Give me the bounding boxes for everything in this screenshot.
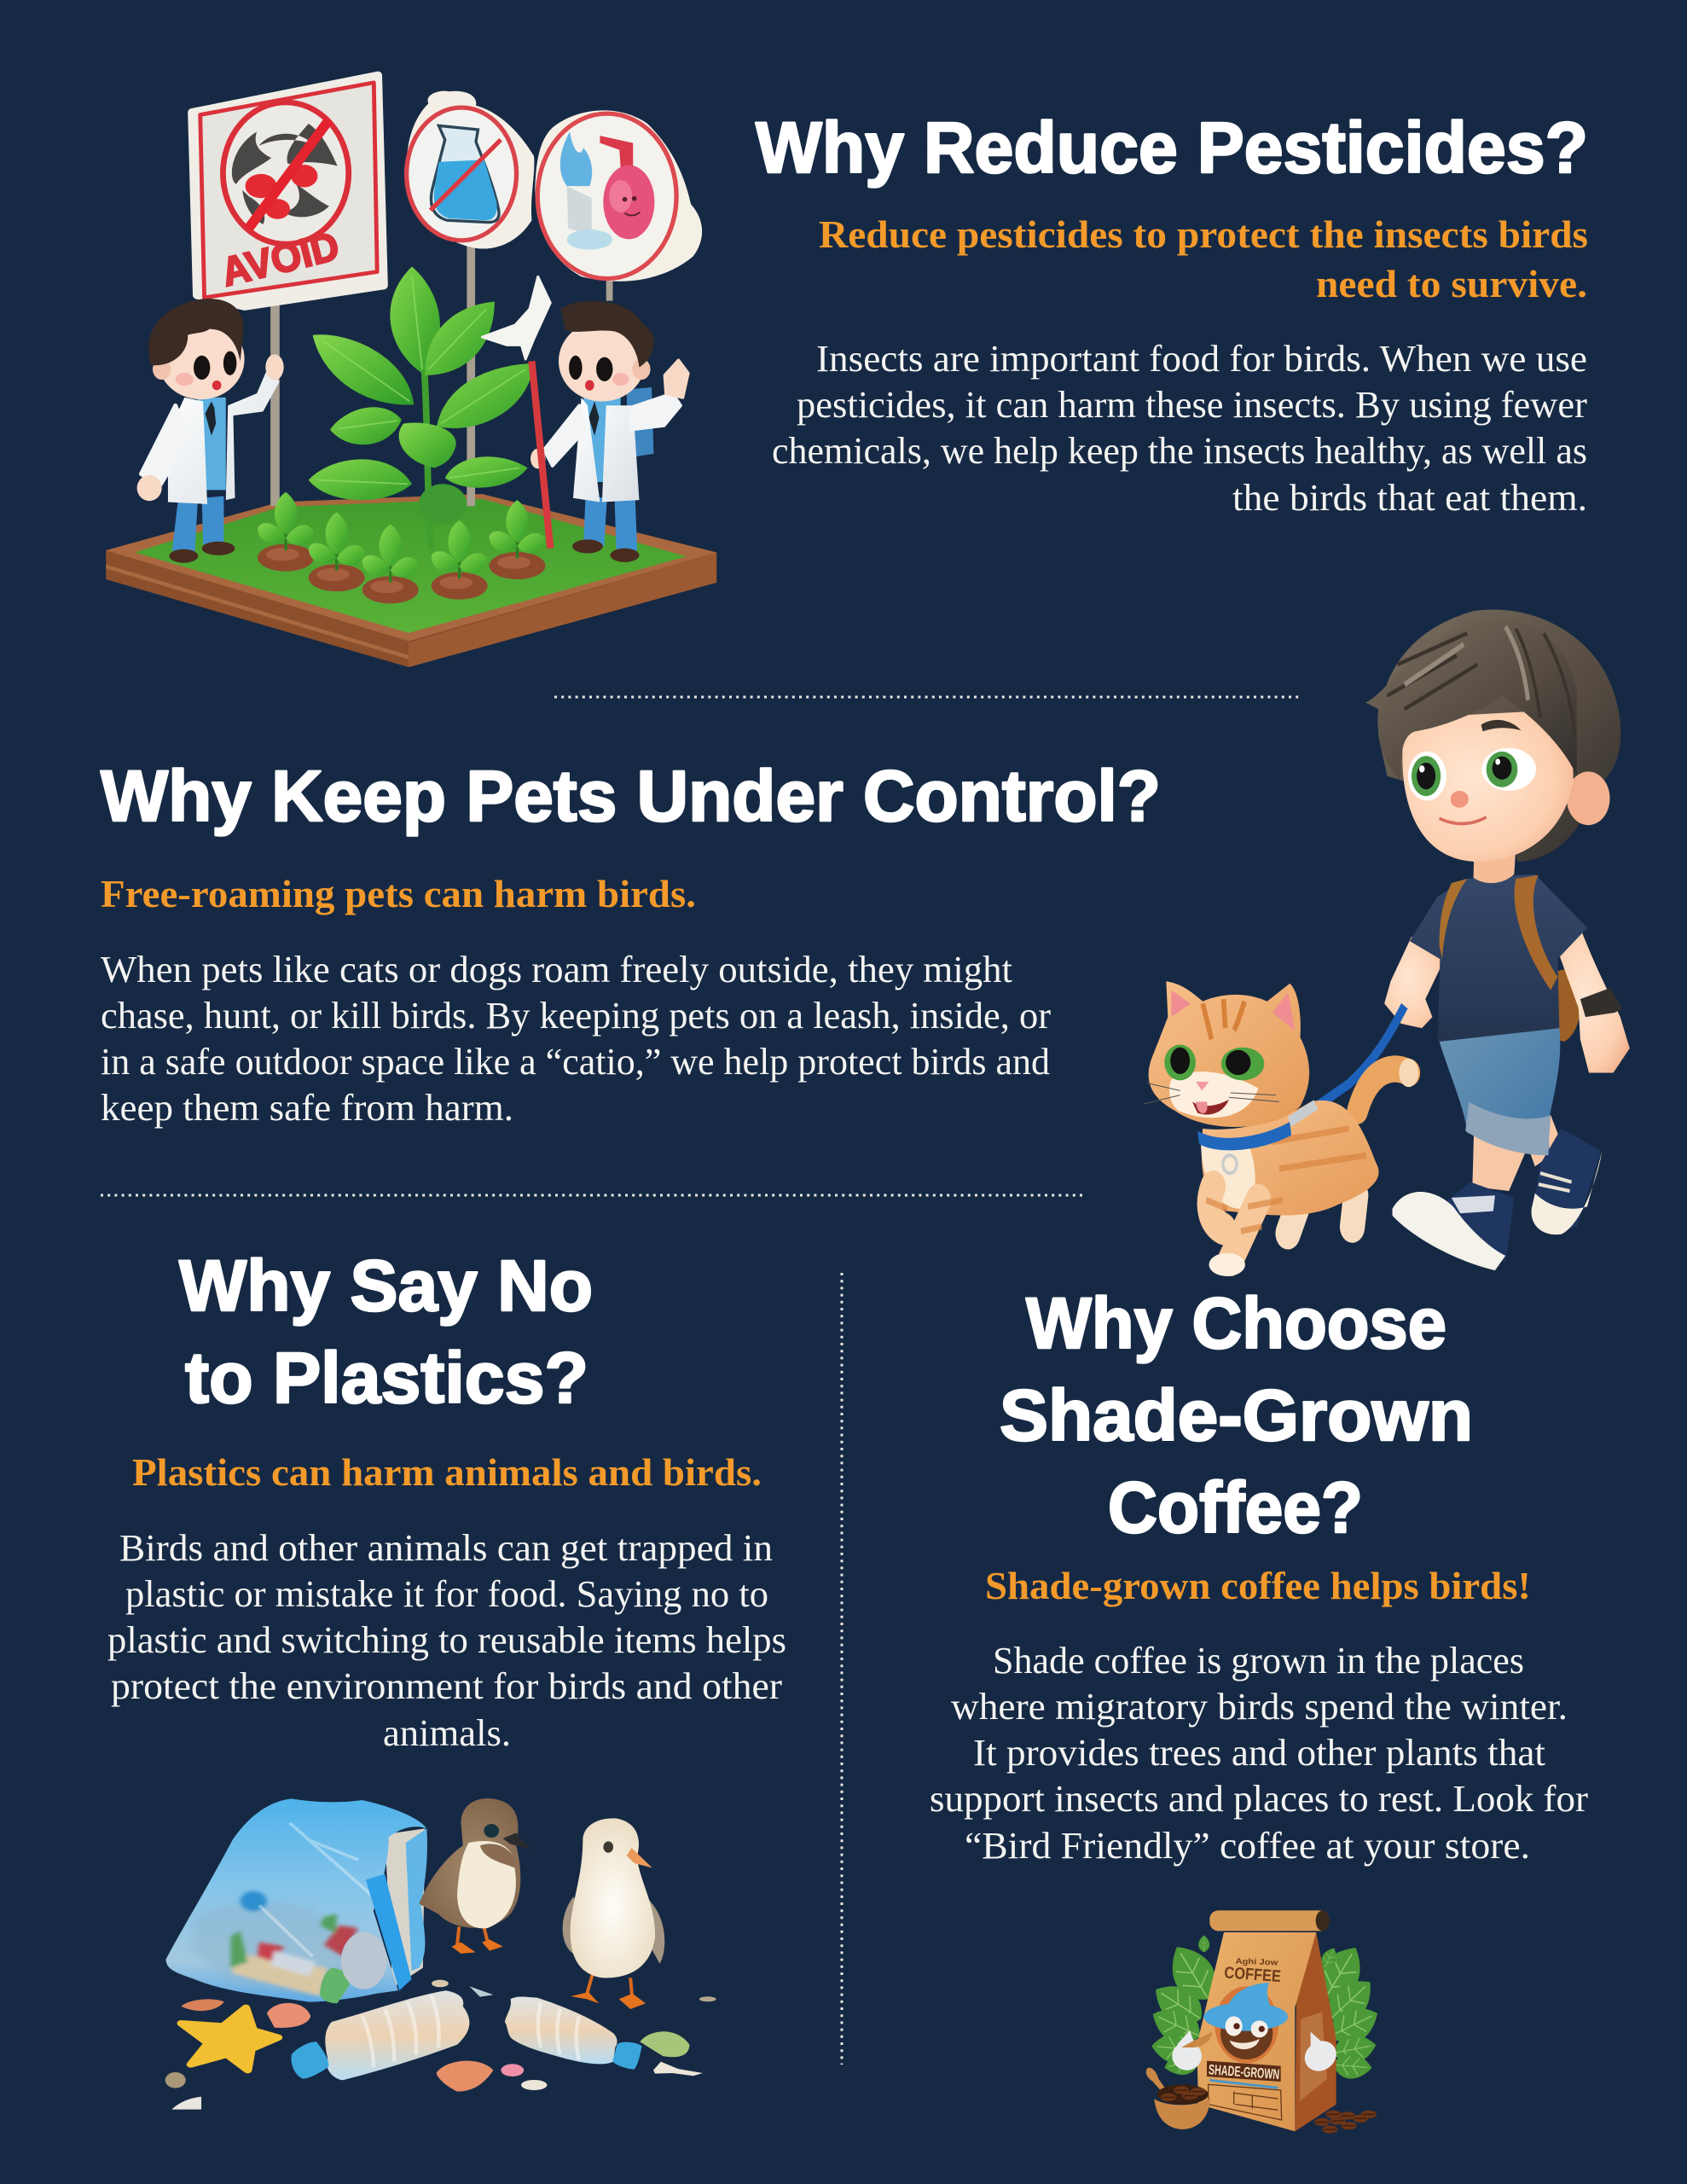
heading: Why Keep Pets Under Control? [101, 756, 1161, 836]
bag front [1197, 1932, 1316, 2131]
leash [1307, 1006, 1405, 1113]
body text: It provides trees and other plants that [973, 1732, 1545, 1774]
subheading: Shade-grown coffee helps birds! [985, 1565, 1531, 1607]
eyes [1408, 752, 1446, 800]
red stick and white bird [482, 276, 550, 549]
shells and starfish [165, 1980, 716, 2110]
mascot face [1203, 1983, 1288, 2063]
sign label: AVOID [217, 224, 344, 295]
back and far legs [1288, 1195, 1356, 1234]
heading: Coffee? [1108, 1467, 1363, 1548]
tail [1358, 1069, 1410, 1111]
coffee text: COFFEE [1224, 1964, 1282, 1986]
loose beans [1161, 2086, 1377, 2134]
body text: Birds and other animals can get trapped in [119, 1527, 773, 1569]
scientist right [530, 301, 688, 562]
scientist left [137, 299, 284, 563]
body text [107, 1527, 786, 1754]
heading: Why Say No [179, 1246, 593, 1326]
seedlings [258, 492, 545, 603]
hair back [1378, 610, 1620, 862]
body text: support insects and places to rest. Look for [930, 1778, 1588, 1820]
body text: chemicals, we help keep the insects healthy, as well as [772, 430, 1587, 472]
body text: chase, hunt, or kill birds. By keeping pets on a leash, inside, or [101, 995, 1051, 1037]
heading: Why Reduce Pesticides? [756, 107, 1588, 188]
body text [930, 1640, 1588, 1867]
bowl and scoop [1146, 2068, 1210, 2129]
cat [1144, 981, 1418, 1276]
bag roll [1209, 1910, 1330, 1931]
subheading: Plastics can harm animals and birds. [132, 1451, 762, 1494]
shade-grown label: SHADE-GROWN [1208, 2061, 1280, 2082]
illustration: plastic waste and birds [165, 1798, 716, 2110]
illustration: scientists, plant and warning signs [106, 75, 716, 667]
body text: pesticides, it can harm these insects. By using fewer [797, 384, 1587, 426]
illustration: boy walking cat on leash [1144, 610, 1630, 1276]
bag side [1295, 1932, 1336, 2131]
subheading: Reduce pesticides to protect the insects birds [819, 213, 1588, 256]
body text: Shade coffee is grown in the places [993, 1640, 1524, 1682]
backpack straps [1440, 879, 1467, 959]
shorts [1440, 1028, 1560, 1155]
heading: Why Choose [1026, 1283, 1446, 1363]
legs and shoes [1472, 1124, 1530, 1191]
panel: why keep pets under control [101, 610, 1630, 1276]
illustration: coffee bag mascot [1145, 1910, 1385, 2134]
collar [1197, 1122, 1291, 1150]
face [1402, 709, 1574, 862]
subheading [819, 213, 1588, 305]
front hair [1365, 620, 1577, 781]
body text: protect the environment for birds and other [111, 1665, 782, 1707]
sign poles [270, 245, 612, 506]
body text: plastic and switching to reusable items helps [107, 1619, 786, 1661]
boy [1365, 610, 1630, 1270]
body text [772, 338, 1587, 519]
central plant [309, 266, 534, 550]
heading: Shade-Grown [1000, 1375, 1473, 1455]
body text: Insects are important food for birds. When we use [816, 338, 1587, 380]
sign: no chemicals [535, 110, 702, 282]
panel: why say no to plastics [107, 1246, 786, 2110]
cat mouth [1192, 1100, 1229, 1114]
subheading: need to survive. [1316, 263, 1587, 305]
cat eyes [1164, 1045, 1196, 1080]
heading: to Plastics? [185, 1338, 588, 1418]
wooden base and grass [106, 494, 716, 667]
backpack [1551, 968, 1580, 1042]
sign: no flask [407, 91, 534, 249]
body text: plastic or mistake it for food. Saying no to [125, 1573, 768, 1615]
body text: keep them safe from harm. [101, 1087, 513, 1129]
legs [1209, 1187, 1258, 1260]
subheading: Free-roaming pets can harm birds. [101, 873, 696, 915]
shirt [1410, 874, 1587, 1042]
heading [179, 1246, 593, 1418]
bottles [291, 1990, 642, 2080]
ear [1567, 771, 1610, 825]
body text [101, 949, 1051, 1129]
panel: why reduce pesticides [106, 75, 1588, 667]
sign: avoid [192, 75, 384, 306]
body text: in a safe outdoor space like a “catio,” we help protect birds and [101, 1041, 1050, 1083]
body text: where migratory birds spend the winter. [951, 1686, 1568, 1728]
brown bird [419, 1798, 530, 1954]
nose and mouth [1451, 791, 1469, 808]
body text: “Bird Friendly” coffee at your store. [965, 1825, 1530, 1867]
arms [1556, 932, 1630, 1072]
white bird [563, 1818, 664, 2009]
shade-grown label [1207, 2061, 1282, 2120]
head [1149, 981, 1309, 1127]
body text: animals. [383, 1712, 511, 1754]
spoon with beans [1181, 2032, 1213, 2048]
neck [1474, 847, 1516, 883]
gloves [1172, 2030, 1342, 2077]
body text: When pets like cats or dogs roam freely outside, they might [101, 949, 1012, 990]
plastic bag with contents [166, 1798, 427, 2003]
heading [1000, 1283, 1473, 1548]
brand text: Aghi Jow [1235, 1957, 1278, 1966]
panel: why choose shade-grown coffee [930, 1283, 1588, 2134]
coffee leaves [1145, 1935, 1385, 2081]
body [1202, 1101, 1379, 1216]
body text: the birds that eat them. [1232, 477, 1587, 519]
